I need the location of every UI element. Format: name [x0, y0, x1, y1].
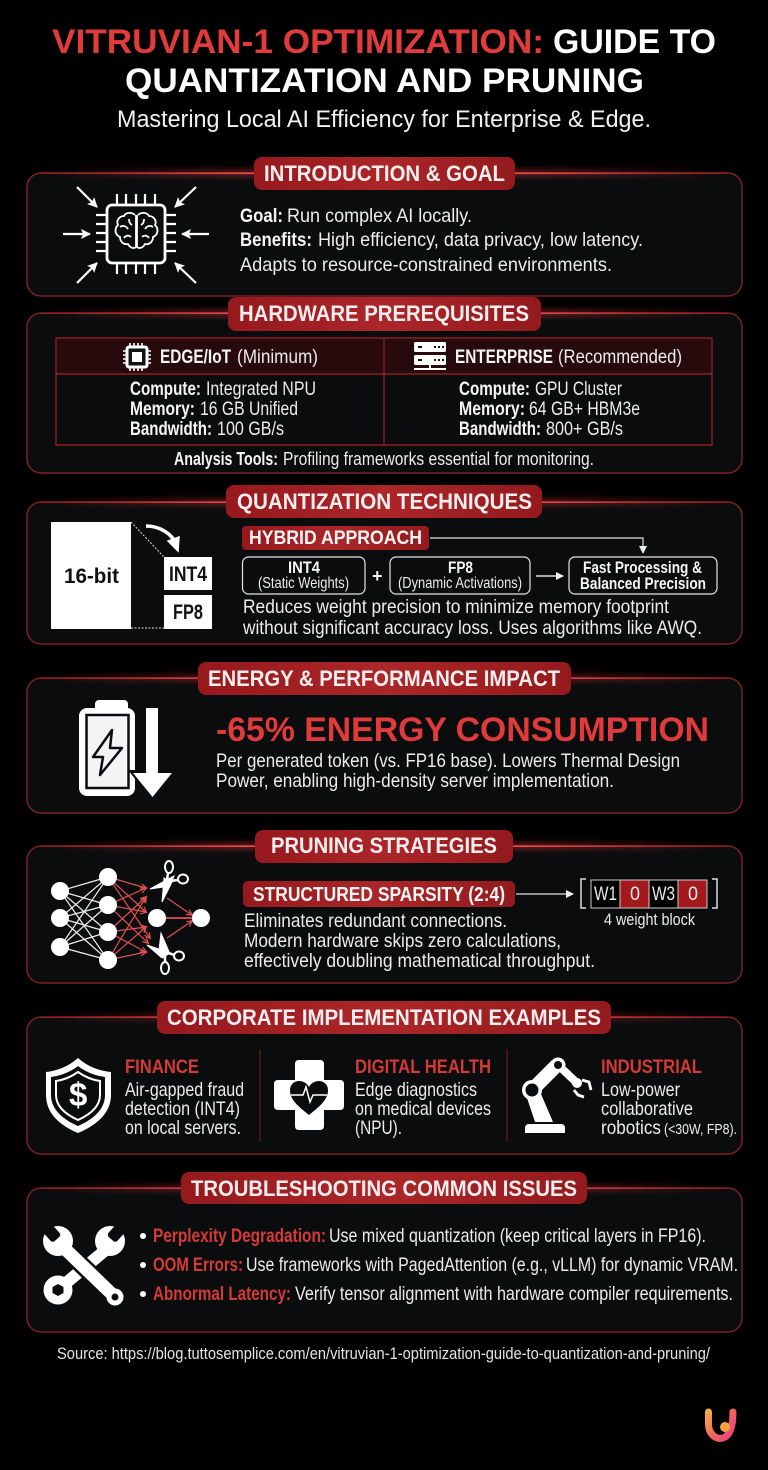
box: int4: (Static Weights): [258, 575, 349, 592]
specs: enterprise: 800+ GB/s: [546, 418, 623, 440]
panel: energy and performance impact: [27, 662, 742, 813]
text: goal and benefits: Run complex AI locally.: [287, 205, 472, 227]
heading: edge iot: (Minimum): [237, 346, 318, 368]
arrow: to weight block: [516, 893, 573, 895]
plus sign: +: [372, 566, 383, 586]
text: analysis tools: [174, 449, 594, 469]
item: finance: Air-gapped fraud: [125, 1079, 244, 1101]
icon: shield with dollar: $: [69, 1076, 87, 1113]
icon: medical cross with heart: [274, 1060, 344, 1130]
panel: pruning strategies: [27, 830, 742, 983]
table: hardware comparison: [56, 338, 712, 445]
box: int4: INT4: [288, 559, 321, 577]
text: pruning description: Eliminates redundant connections.: [244, 910, 507, 932]
text: pruning description: [244, 910, 595, 972]
list item: perplexity degradation: [140, 1225, 706, 1247]
diagram: 4 weight block: [581, 879, 717, 929]
text: goal and benefits: [240, 205, 643, 276]
icon: server: [414, 342, 446, 369]
heading: corporate implementation examples: CORPORATE IMPLEMENTATION EXAMPLES: [167, 1005, 601, 1030]
panel: hardware prerequisites: [27, 297, 742, 473]
box: int4: [242, 557, 365, 594]
panel: corporate implementation examples: [27, 1001, 742, 1154]
text: goal and benefits: High efficiency, data privacy, low latency.: [318, 229, 643, 251]
item: industrial: Low-power: [601, 1079, 680, 1101]
list item: abnormal latency: Abnormal Latency:: [153, 1283, 291, 1305]
item: industrial: robotics: [601, 1117, 661, 1139]
title: [52, 23, 716, 100]
text: pruning description: Modern hardware skips zero calculations,: [244, 930, 561, 952]
icon: robotic arm: [522, 1058, 591, 1133]
text: analysis tools: Profiling frameworks essential for monitoring.: [283, 449, 594, 469]
icon: shield with dollar: [46, 1058, 111, 1133]
panel: troubleshooting common issues: [27, 1172, 742, 1332]
heading: energy and performance impact: ENERGY & PERFORMANCE IMPACT: [208, 666, 561, 691]
box: fp8: [390, 557, 530, 594]
text: energy description: Per generated token (vs. FP16 base). Lowers Thermal Design: [216, 750, 680, 772]
text: goal and benefits: Benefits:: [240, 229, 312, 251]
diagram: 16-bit to int4 and fp8: FP8: [173, 601, 203, 624]
panel: introduction and goal: [27, 157, 742, 296]
text: analysis tools: Analysis Tools:: [174, 449, 278, 469]
heading: enterprise: [455, 346, 682, 368]
label: structured sparsity: STRUCTURED SPARSITY (2:4): [253, 884, 505, 906]
item: finance: on local servers.: [125, 1117, 241, 1139]
box: fp8: (Dynamic Activations): [398, 575, 522, 592]
item: digital health: [355, 1056, 491, 1139]
item: digital health: DIGITAL HEALTH: [355, 1056, 491, 1078]
label: hybrid approach: HYBRID APPROACH: [249, 527, 422, 549]
divider: [260, 1049, 507, 1141]
box: result: Fast Processing &: [583, 559, 702, 577]
item: finance: FINANCE: [125, 1056, 199, 1078]
diagram: 16-bit to int4 and fp8: [51, 522, 212, 629]
logo: [708, 1412, 733, 1438]
diagram: pruned neural network: [51, 861, 210, 974]
icon: scissors top: [150, 861, 188, 902]
heading: quantization techniques: QUANTIZATION TECHNIQUES: [237, 489, 532, 514]
heading: introduction and goal: INTRODUCTION & GOAL: [264, 161, 505, 186]
item: digital health: (NPU).: [355, 1117, 402, 1139]
icon: crossed wrenches: [38, 1219, 130, 1306]
text: quantization description: without significant accuracy loss. Uses algorithms like AWQ.: [242, 617, 702, 639]
diagram: 16-bit to int4 and fp8: 16-bit: [64, 565, 119, 588]
text: energy description: [216, 750, 680, 792]
heading: edge iot: EDGE/IoT: [160, 346, 231, 368]
diagram: 4 weight block: W3: [652, 883, 675, 905]
text: quantization description: [242, 596, 702, 639]
diagram: 4 weight block: 0: [630, 883, 640, 905]
specs: enterprise: 64 GB+ HBM3e: [529, 398, 640, 420]
specs: edge iot: Memory:: [130, 398, 195, 420]
specs: enterprise: Compute:: [459, 378, 530, 400]
icon: scissors bottom: [147, 933, 184, 974]
specs: enterprise: [459, 378, 640, 440]
item: finance: [125, 1056, 244, 1139]
item: industrial: collaborative: [601, 1098, 693, 1120]
list item: perplexity degradation: Perplexity Degradation:: [153, 1225, 326, 1247]
specs: edge iot: Bandwidth:: [130, 418, 212, 440]
specs: edge iot: 100 GB/s: [217, 418, 284, 440]
heading: pruning strategies: PRUNING STRATEGIES: [271, 833, 497, 858]
specs: enterprise: GPU Cluster: [535, 378, 622, 400]
icon: battery with down arrow: [79, 700, 177, 801]
item: digital health: Edge diagnostics: [355, 1079, 477, 1101]
arrow: hybrid to result: [430, 538, 643, 553]
diagram: 4 weight block: 4 weight block: [604, 910, 695, 929]
item: industrial: (<30W, FP8).: [664, 1121, 737, 1138]
text: energy description: Power, enabling high-density server implementation.: [216, 770, 614, 792]
specs: edge iot: Compute:: [130, 378, 201, 400]
diagram: 16-bit to int4 and fp8: INT4: [169, 563, 207, 586]
heading: edge iot: [160, 346, 318, 368]
text: quantization description: Reduces weight precision to minimize memory footprint: [243, 596, 670, 618]
text: goal and benefits: Adapts to resource-constrained environments.: [240, 254, 612, 276]
text: goal and benefits: Goal:: [240, 205, 283, 227]
subtitle: Mastering Local AI Efficiency for Enterprise & Edge.: [117, 106, 651, 133]
specs: enterprise: Memory:: [459, 398, 525, 420]
box: fp8: FP8: [448, 559, 473, 577]
list item: oom errors: OOM Errors:: [153, 1254, 243, 1276]
diagram: 4 weight block: 0: [688, 883, 698, 905]
diagram: 4 weight block: W1: [594, 883, 617, 905]
heading: enterprise: (Recommended): [558, 346, 682, 368]
heading: hardware prerequisites: [228, 297, 541, 331]
specs: edge iot: 16 GB Unified: [200, 398, 298, 420]
box: result: Balanced Precision: [580, 575, 706, 593]
specs: edge iot: [130, 378, 316, 440]
heading: troubleshooting common issues: TROUBLESHOOTING COMMON ISSUES: [191, 1176, 577, 1201]
item: finance: detection (INT4): [125, 1098, 240, 1120]
specs: enterprise: Bandwidth:: [459, 418, 541, 440]
icon: chip: [123, 343, 151, 371]
arrow: to result: [536, 575, 563, 577]
title: VITRUVIAN-1 OPTIMIZATION:: [52, 23, 544, 61]
panel: quantization techniques: [27, 485, 742, 644]
item: industrial: [601, 1056, 737, 1139]
list item: abnormal latency: [140, 1283, 733, 1305]
heading: enterprise: ENTERPRISE: [455, 346, 553, 368]
title: GUIDE TO: [553, 23, 716, 61]
icon: chip with brain and inward arrows: [63, 187, 209, 283]
title: QUANTIZATION AND PRUNING: [125, 62, 644, 100]
specs: edge iot: Integrated NPU: [206, 378, 316, 400]
item: digital health: on medical devices: [355, 1098, 491, 1120]
heading: hardware prerequisites: HARDWARE PREREQUISITES: [239, 301, 529, 326]
text: pruning description: effectively doubling mathematical throughput.: [244, 950, 595, 972]
item: industrial: INDUSTRIAL: [601, 1056, 702, 1078]
stat: energy reduction: -65% ENERGY CONSUMPTION: [216, 711, 709, 749]
box: result: [569, 557, 717, 594]
